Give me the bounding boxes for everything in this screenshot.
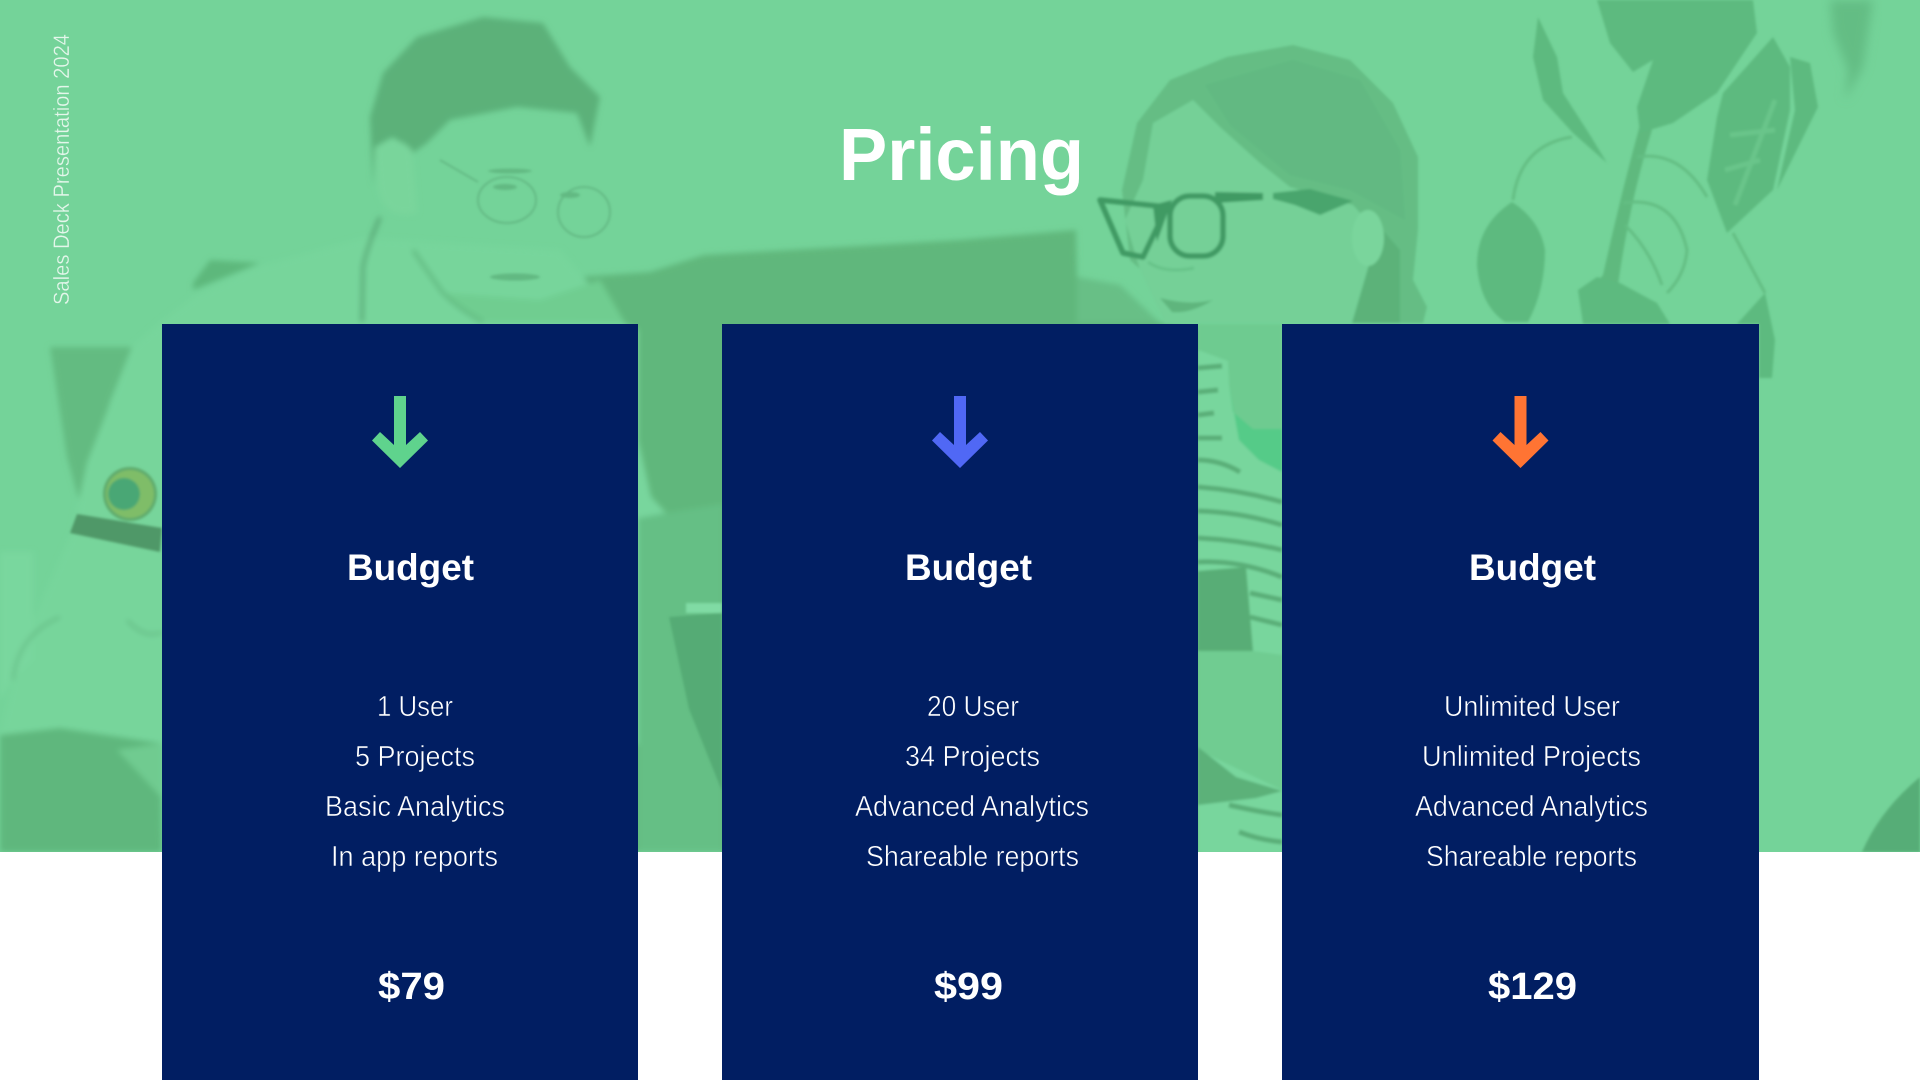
light wedge beside card 1 <box>638 448 664 518</box>
woman's ear <box>1352 210 1384 266</box>
woman's hair <box>1122 45 1427 323</box>
background photo with green overlay <box>0 0 1920 852</box>
man's jaw line <box>413 250 483 322</box>
sleeve curve <box>12 620 156 676</box>
cushion behind shoulder <box>193 260 260 290</box>
hair behind woman's ear <box>1352 227 1400 323</box>
card 1 heading: Budget <box>347 547 474 588</box>
woman's glasses <box>1100 196 1223 257</box>
lower left shadow <box>0 728 162 852</box>
icon: green down arrow <box>372 396 428 468</box>
card 1 feature list: 5 Projects <box>355 741 475 773</box>
card 1 feature list: Basic Analytics <box>325 791 505 823</box>
woman's nose shadow <box>1148 262 1194 270</box>
card 3 price: $129 <box>1488 966 1577 1008</box>
pale fold on left sleeve <box>0 552 33 700</box>
plant: lighter veins <box>1725 100 1775 205</box>
card 1 price: $79 <box>378 966 445 1008</box>
card 2 feature list: 34 Projects <box>905 741 1040 773</box>
card 1 feature list: In app reports <box>331 841 498 873</box>
phone in man's hand <box>669 613 722 791</box>
panel: pricing card 2 <box>722 324 1198 1080</box>
card 1 feature list: 1 User <box>377 691 453 723</box>
card 2 feature list <box>855 691 1089 873</box>
card 2 feature list: Shareable reports <box>866 841 1079 873</box>
icon: orange down arrow <box>1492 396 1548 468</box>
man's glasses <box>440 160 610 237</box>
panel: pricing card 3 <box>1282 324 1759 1080</box>
plant leaves <box>1477 0 1818 378</box>
left cushion <box>50 347 132 504</box>
woman's striped shirt <box>1198 350 1282 852</box>
card 1 feature list <box>325 691 505 873</box>
title: Pricing <box>839 113 1084 196</box>
blurred leaf at top right <box>1830 0 1873 88</box>
plant: thin arching stems <box>1513 137 1765 293</box>
phone highlight <box>686 603 722 613</box>
panel: pricing card 1 <box>162 324 638 1080</box>
card 3 feature list: Unlimited Projects <box>1422 741 1641 773</box>
sleeve patch <box>70 467 162 552</box>
card 2 price: $99 <box>934 966 1003 1008</box>
man's jaw shadow <box>443 280 625 323</box>
woman's face <box>1125 100 1380 323</box>
lighter fold in lower left <box>117 743 162 798</box>
card 3 feature list <box>1415 691 1648 873</box>
man's shirt <box>79 276 640 744</box>
darker upper hair <box>1205 60 1405 220</box>
lower right shape <box>1862 777 1920 852</box>
man's eyes, brows and mouth <box>488 169 580 281</box>
lighter seat band between the cards <box>638 500 723 852</box>
man's collar line <box>362 217 380 322</box>
card 3 feature list: Unlimited User <box>1444 691 1620 723</box>
man's ear <box>400 142 412 152</box>
lighter sofa end beside woman <box>1077 277 1160 323</box>
icon: blue down arrow <box>932 396 988 468</box>
card 2 feature list: 20 User <box>927 691 1019 723</box>
glasses bridge and temple <box>1153 189 1353 242</box>
man's hair <box>370 17 600 187</box>
sofa behind the people <box>560 230 1200 852</box>
woman's mouth <box>1160 298 1213 312</box>
plant: main stem <box>1590 125 1652 290</box>
card 3 feature list: Advanced Analytics <box>1415 791 1648 823</box>
card 2 feature list: Advanced Analytics <box>855 791 1089 823</box>
woman's neck <box>1202 326 1280 428</box>
card 3 feature list: Shareable reports <box>1426 841 1637 873</box>
card 3 heading: Budget <box>1469 547 1596 588</box>
card 2 heading: Budget <box>905 547 1032 588</box>
running head: vertical label: Sales Deck Presentation 2024 <box>49 34 74 305</box>
